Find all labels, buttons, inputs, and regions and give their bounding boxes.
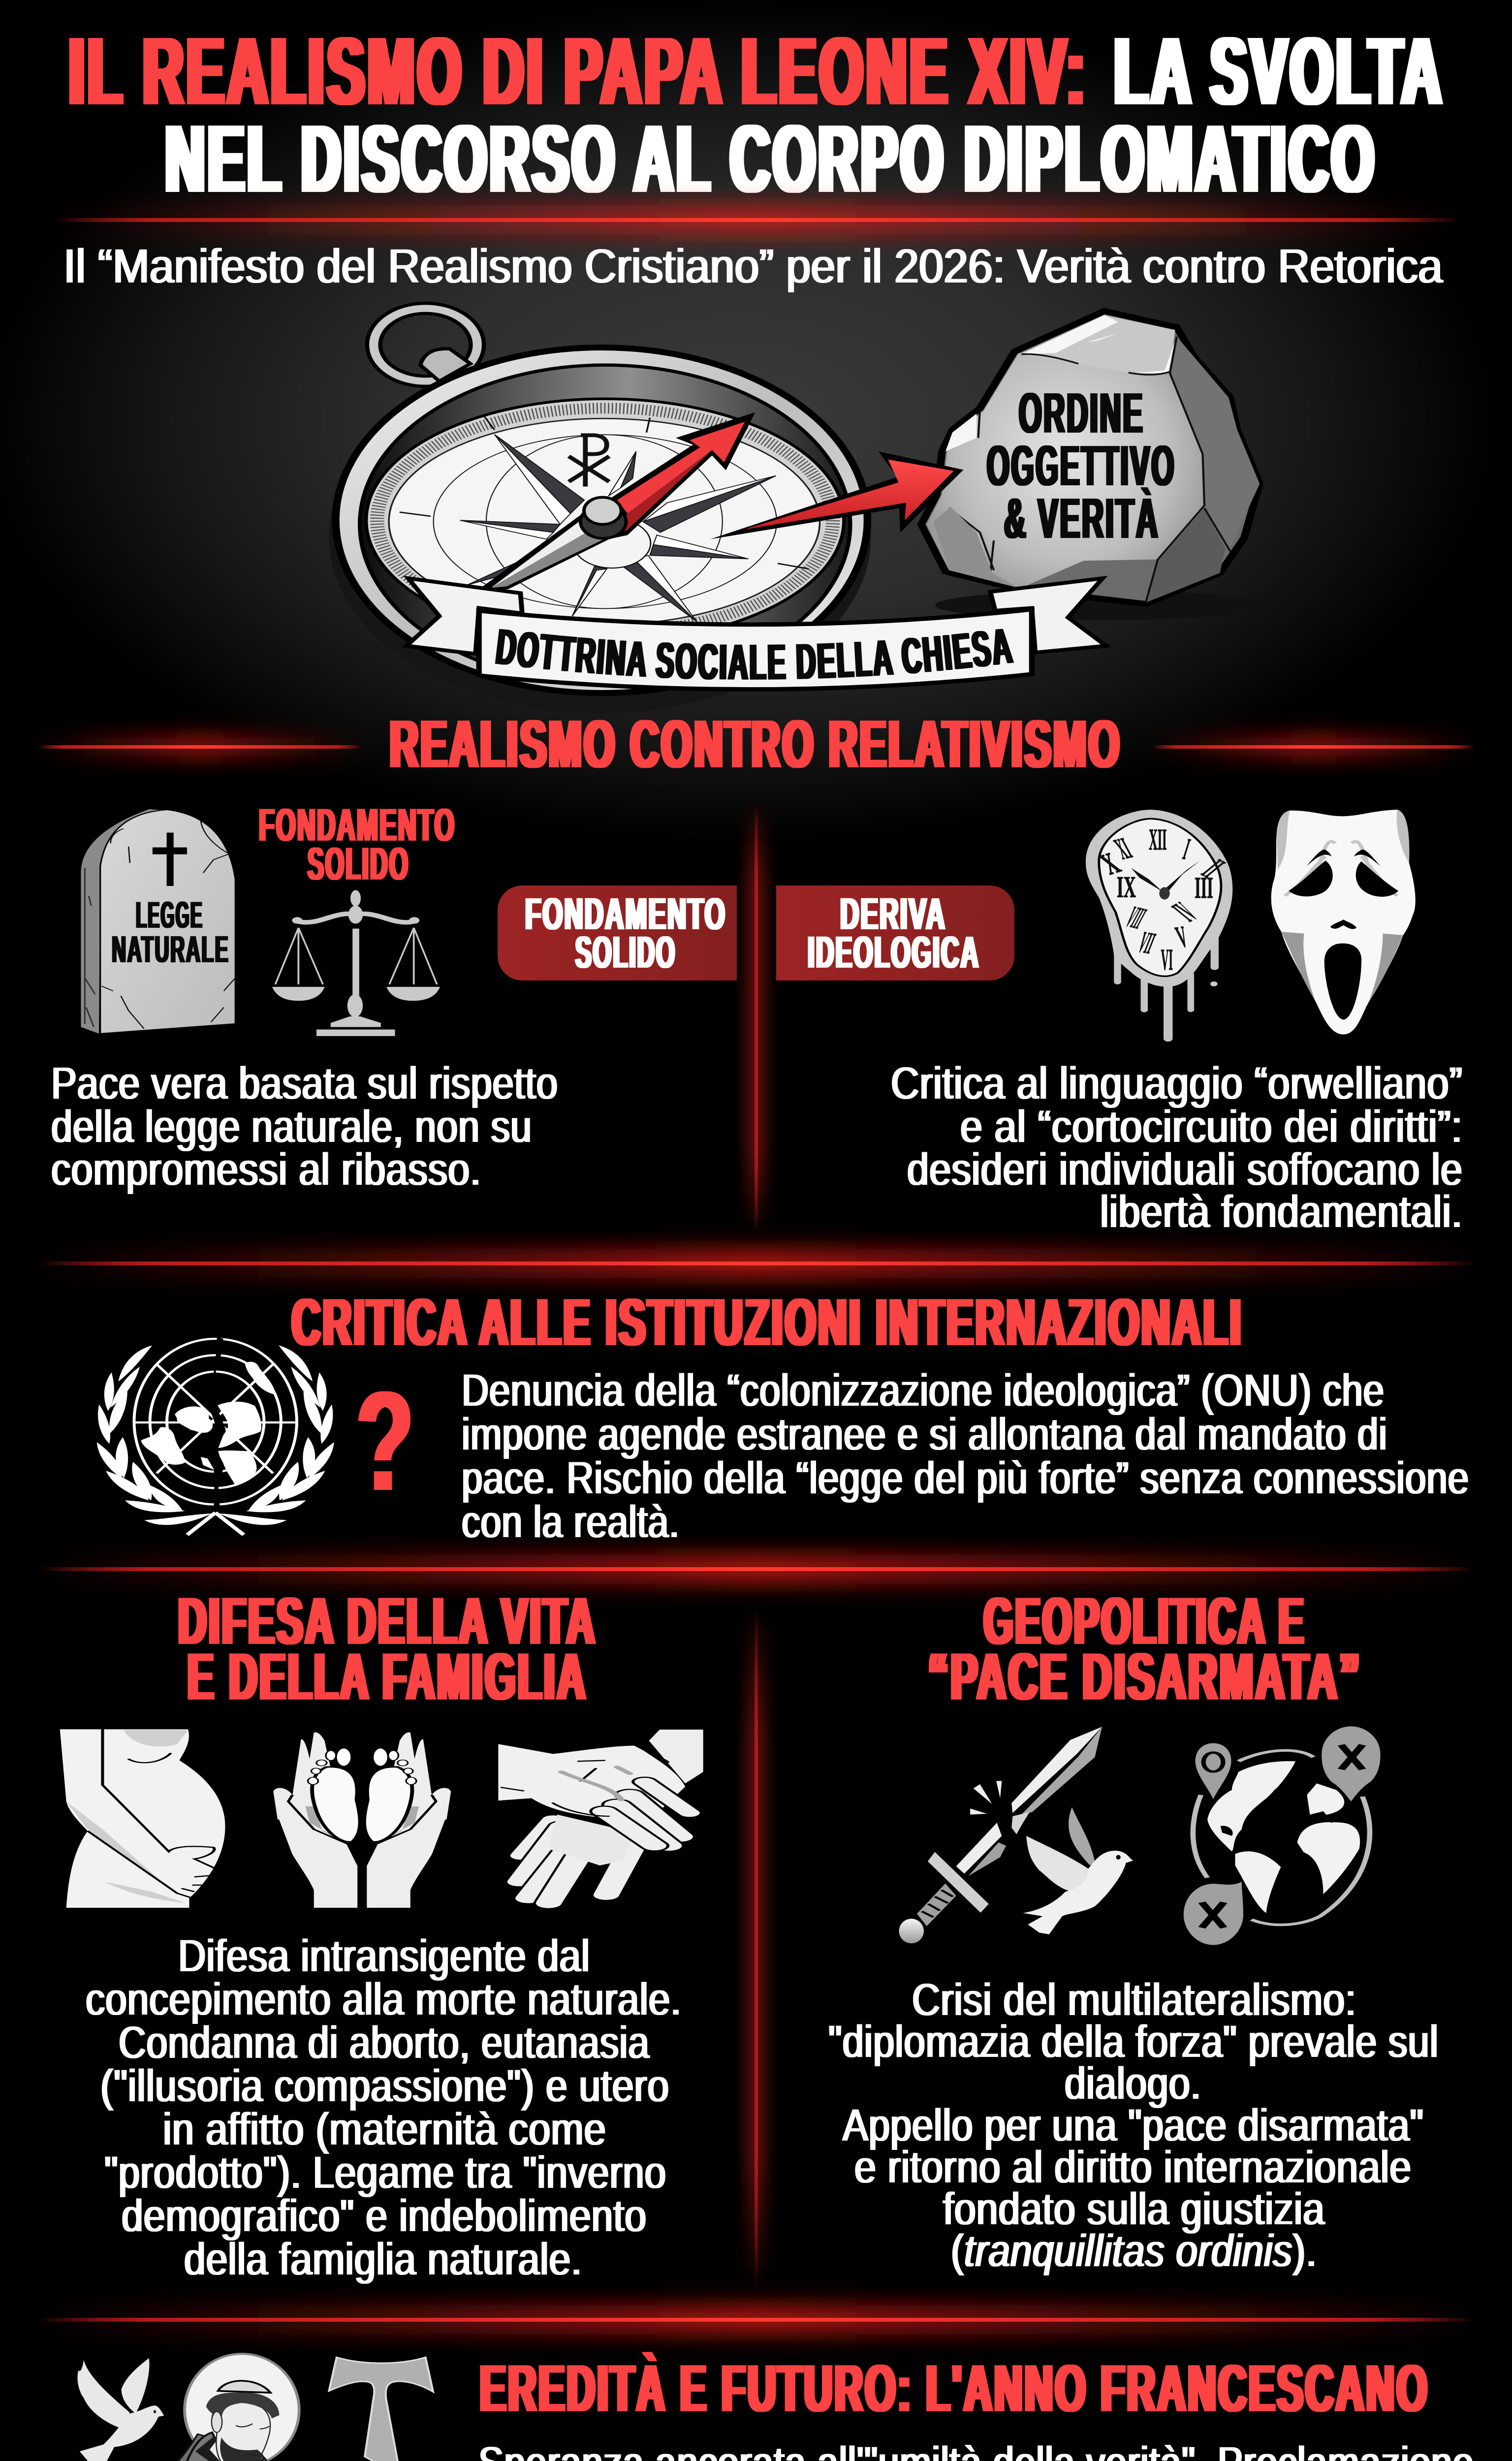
- text: crisi del multilateralismo: (tranquillitas ordinis).: [951, 2226, 1317, 2276]
- text: denuncia: [462, 1365, 1469, 1547]
- icon: rock: [921, 311, 1266, 620]
- icon: compass: [329, 308, 871, 713]
- upper hand: [498, 1744, 685, 1823]
- arrow to rock: [710, 451, 963, 539]
- clock numerals: VIII: [1121, 900, 1151, 935]
- clock numerals: II: [1194, 853, 1233, 883]
- tombstone label: NATURALE: [112, 928, 229, 971]
- text: pace vera: [51, 1058, 558, 1195]
- divider: [38, 1554, 1475, 1584]
- illustration: saint francis with dove, tau and wolf: [78, 2354, 433, 2461]
- badge: deriva ideologica: IDEOLOGICA: [808, 927, 980, 978]
- divider under title: [53, 205, 1461, 235]
- vertical divider bottom: [746, 1609, 766, 2288]
- pin top right: [1322, 1726, 1381, 1801]
- icon: scream mask: [1271, 810, 1416, 1035]
- clock numerals: VII: [1134, 925, 1160, 960]
- rock label: ORDINE: [1019, 381, 1144, 445]
- text: crisi del multilateralismo: Crisi del multilateralismo:: [912, 1975, 1356, 2025]
- heading: difesa della vita: DIFESA DELLA VITA: [178, 1583, 597, 1658]
- badge: deriva ideologica: [776, 885, 1014, 980]
- rock label: OGGETTIVO: [987, 434, 1176, 498]
- icon: baby feet in hands: [273, 1733, 451, 1908]
- text: difesa intransigente: ("illusoria compassione") e utero: [100, 2061, 669, 2111]
- hero illustration: [329, 301, 1264, 733]
- icon: pregnant woman: [60, 1729, 225, 1908]
- halo: [185, 2354, 299, 2461]
- text: pace vera: Pace vera basata sul rispetto: [51, 1058, 558, 1108]
- clock numerals: XII: [1149, 822, 1167, 856]
- clock numerals: III: [1195, 871, 1213, 905]
- chi-rho symbol: [569, 435, 609, 486]
- text: difesa intransigente: della famiglia naturale.: [184, 2234, 582, 2284]
- text: pace vera: compromessi al ribasso.: [51, 1144, 481, 1195]
- icon: broken UN emblem: [97, 1337, 334, 1535]
- clock numerals: IV: [1164, 896, 1205, 927]
- text: critica al linguaggio: [891, 1058, 1463, 1237]
- pin bottom left: [1184, 1882, 1243, 1945]
- needle red half: [608, 412, 755, 539]
- text: difesa intransigente: "prodotto"). Legame tra "inverno: [104, 2147, 666, 2198]
- tombstone label: [112, 894, 229, 971]
- text: difesa intransigente: concepimento alla morte naturale.: [86, 1974, 682, 2024]
- icon: broken sword and dove: [899, 1727, 1134, 1943]
- text: crisi del multilateralismo: fondato sulla giustizia: [943, 2184, 1325, 2234]
- badge: fondamento solido: FONDAMENTO: [525, 889, 726, 939]
- label: fondamento solido red: SOLIDO: [308, 838, 410, 889]
- text: crisi del multilateralismo: dialogo.: [1065, 2058, 1201, 2109]
- text: difesa intransigente: [86, 1931, 682, 2284]
- clock numerals: X: [1093, 846, 1127, 881]
- heading: difesa della vita: [178, 1583, 597, 1714]
- badge: fondamento solido: [498, 885, 737, 980]
- clock numerals: VI: [1161, 943, 1173, 977]
- subtitle: Il “Manifesto del Realismo Cristiano” per il 2026: Verità contro Retorica: [63, 239, 1443, 293]
- icon: tombstone legge naturale: [81, 809, 235, 1034]
- heading: difesa della vita: E DELLA FAMIGLIA: [188, 1639, 588, 1714]
- text: difesa intransigente: Condanna di aborto, eutanasia: [119, 2018, 650, 2068]
- icon: elderly hands: [498, 1730, 703, 1903]
- banner: [402, 576, 1111, 692]
- text: crisi del multilateralismo: Appello per una "pace disarmata": [843, 2100, 1424, 2150]
- icon: melting clock: [1086, 810, 1233, 1039]
- vertical divider top: [746, 804, 766, 1233]
- icon: scales of justice: [272, 890, 440, 1036]
- hero background glow: [0, 0, 1512, 842]
- icon: question mark: ?: [356, 1362, 413, 1520]
- text: critica al linguaggio: libertà fondamentali.: [1100, 1187, 1463, 1237]
- label: fondamento solido red: FONDAMENTO: [259, 799, 456, 851]
- clock numerals: XI: [1109, 831, 1137, 866]
- tombstone label: LEGGE: [136, 894, 203, 936]
- clock numerals: [1093, 822, 1233, 977]
- robe: [118, 2434, 284, 2461]
- lower hand: [519, 1820, 634, 1903]
- divider: [38, 2305, 1475, 2335]
- badge: fondamento solido: SOLIDO: [575, 927, 676, 978]
- clock numerals: IX: [1117, 870, 1136, 904]
- needle silver half: [477, 513, 612, 591]
- text: crisi del multilateralismo: e ritorno al diritto internazionale: [854, 2142, 1412, 2192]
- clock numerals: V: [1172, 919, 1192, 954]
- text: pace vera: della legge naturale, non su: [51, 1102, 532, 1152]
- text: difesa intransigente: Difesa intransigente dal: [178, 1931, 590, 1981]
- icon: globe with pins: [1184, 1726, 1381, 1945]
- face: [212, 2401, 270, 2461]
- heading: geopolitica: [928, 1583, 1362, 1714]
- banner text: DOTTRINA SOCIALE DELLA CHIESA: [495, 629, 1014, 680]
- text: crisi del multilateralismo: [828, 1975, 1439, 2276]
- text: difesa intransigente: demografico" e indebolimento: [122, 2191, 647, 2241]
- pin small: [1196, 1743, 1231, 1799]
- icon: tau cross: [329, 2357, 433, 2461]
- text: denuncia: con la realtà.: [462, 1497, 680, 1547]
- dove: [1069, 1807, 1095, 1865]
- text: difesa intransigente: in affitto (maternità come: [163, 2104, 606, 2154]
- rock label: & VERITÀ: [1004, 486, 1160, 550]
- divider: [38, 1249, 1475, 1278]
- badge: deriva ideologica: DERIVA: [840, 889, 946, 939]
- label: fondamento solido red: [259, 799, 456, 889]
- clock numerals: I: [1180, 832, 1194, 866]
- rock label: [987, 381, 1176, 550]
- icon: dove: [78, 2358, 164, 2461]
- title: [69, 17, 1445, 213]
